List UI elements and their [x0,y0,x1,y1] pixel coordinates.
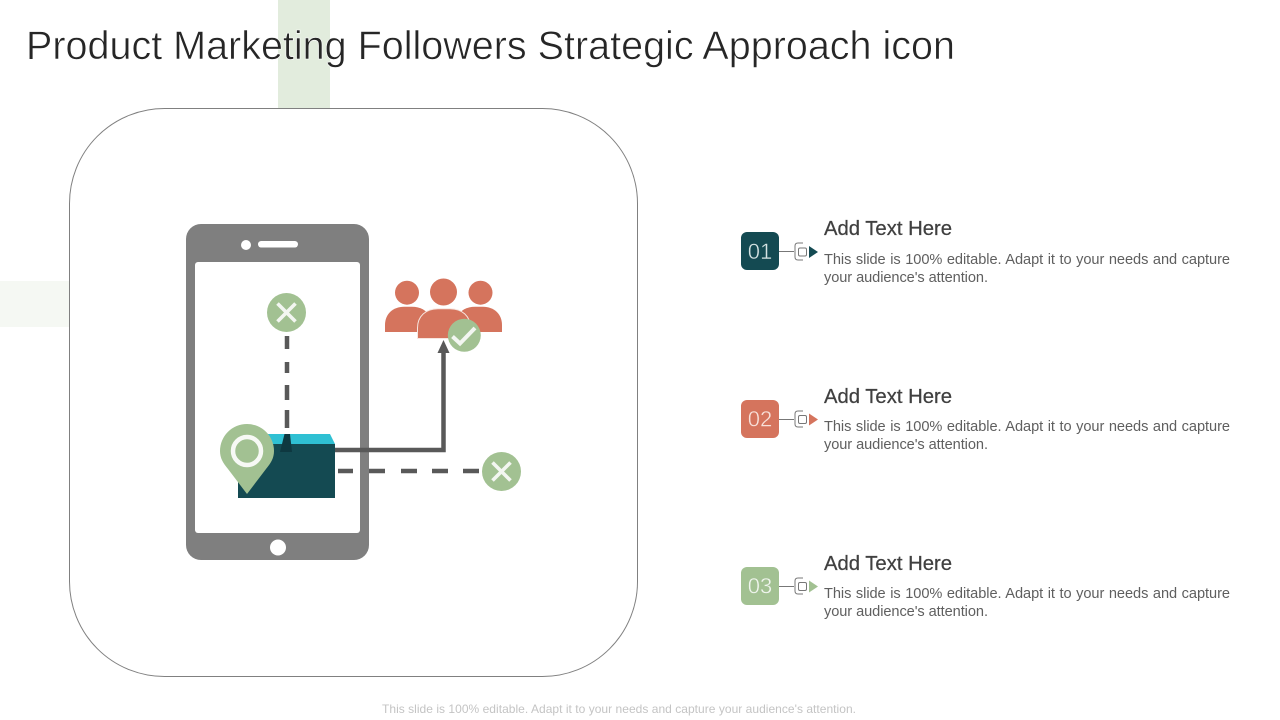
badge 03: 03 [748,574,772,598]
footer note: This slide is 100% editable. Adapt it to your needs and capture your audience's attention. [382,702,856,716]
badge 03 [741,567,779,605]
list item 02 [741,386,1230,453]
connector 03 [779,578,818,594]
description 01: This slide is 100% editable. Adapt it to your needs and capture [824,252,1230,268]
icon: location pin [220,424,274,494]
illustration: phone marketing diagram [186,224,521,560]
icon: smartphone [186,224,369,560]
connector 01 [779,243,818,260]
badge 02 [741,400,779,438]
badge 01: 01 [748,239,772,264]
description 02: your audience's attention. [824,437,988,453]
description 03: This slide is 100% editable. Adapt it to your needs and capture [824,586,1230,602]
heading 03: Add Text Here [824,553,952,575]
badge 02: 02 [748,406,772,432]
title: Product Marketing Followers Strategic Approach icon [26,24,955,68]
dashed line: right to rejected option [338,469,479,473]
badge 01 [741,232,779,270]
dashed line: up to rejected option [285,336,289,428]
list item 01 [741,218,1230,286]
icon: right cross circle [482,452,521,491]
icon: product box [238,434,335,498]
icon: check circle [448,319,481,352]
connector 02 [779,411,818,427]
list item 03 [741,553,1230,620]
arrow: box to followers [335,340,450,450]
heading 02: Add Text Here [824,386,952,408]
description 01: your audience's attention. [824,270,988,286]
heading 01: Add Text Here [824,218,952,240]
description 02: This slide is 100% editable. Adapt it to your needs and capture [824,419,1230,435]
icon: followers group [385,278,502,338]
panel: rounded illustration frame [70,108,638,676]
description 03: your audience's attention. [824,604,988,620]
icon: top cross circle [267,293,306,332]
